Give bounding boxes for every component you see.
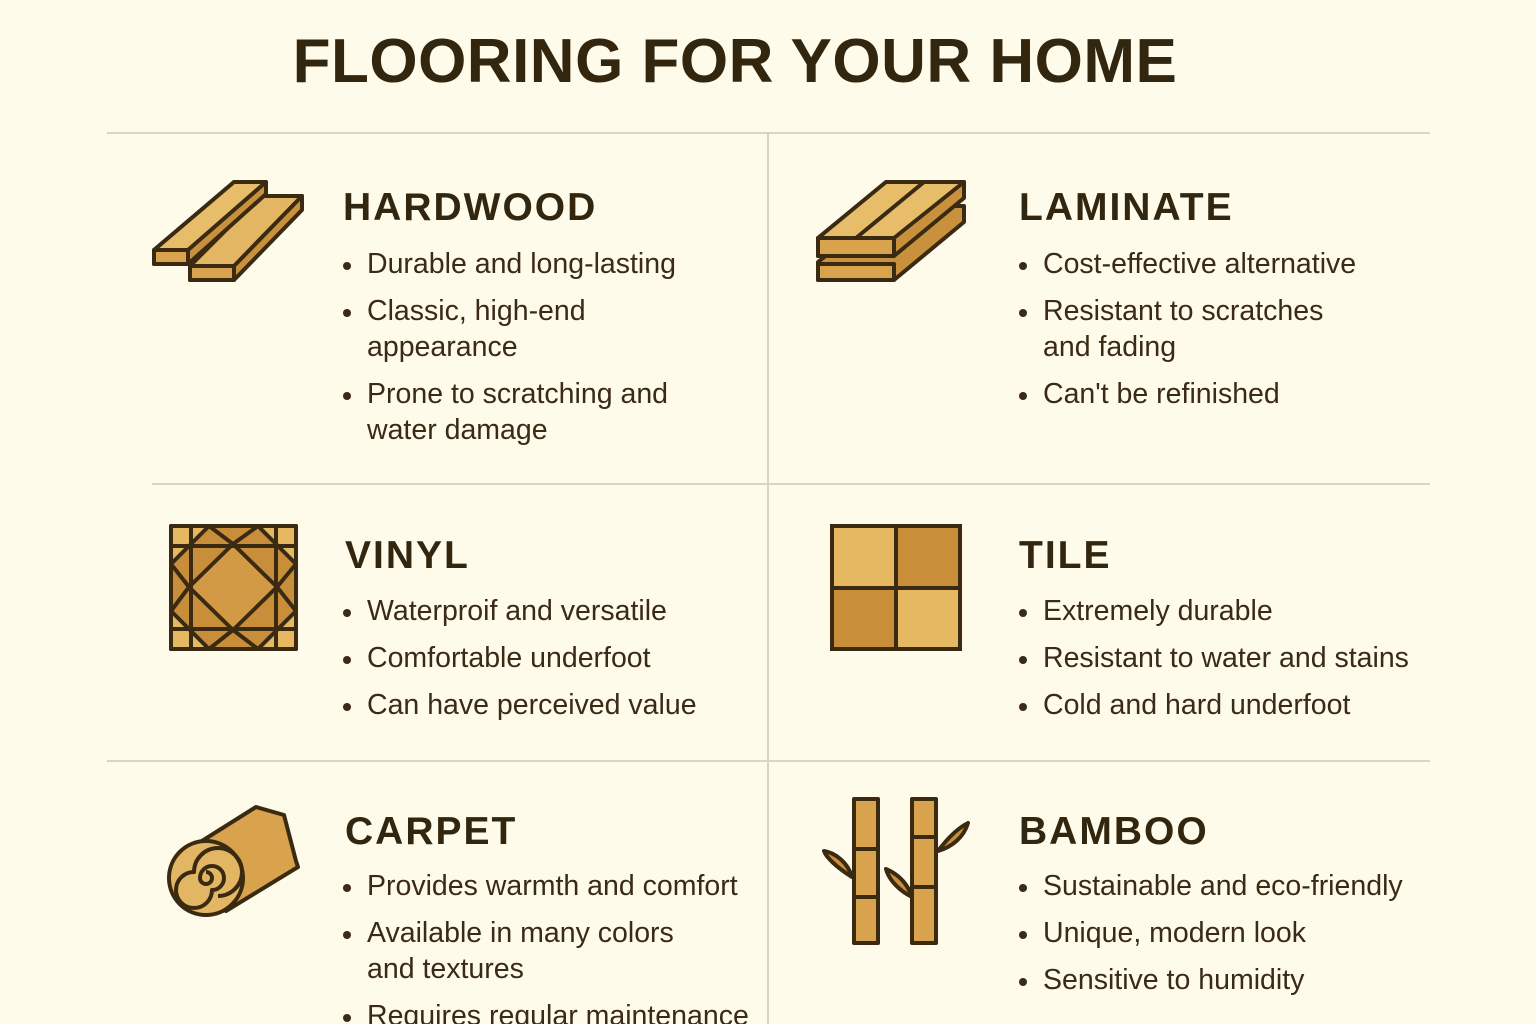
bullets: tile: Extremely durable <box>1043 595 1273 627</box>
bullets: laminate <box>1019 248 1356 410</box>
bullets: hardwood: Prone to scratching and <box>367 378 668 410</box>
icon: bamboo stalks <box>822 797 970 945</box>
icon: tile squares <box>830 524 962 651</box>
icon: vinyl tile pattern <box>169 524 298 651</box>
icon: carpet roll <box>167 805 300 917</box>
bullets: carpet: and textures <box>367 953 524 985</box>
icon: hardwood planks <box>152 180 304 282</box>
bullets: bamboo: Sustainable and eco-friendly <box>1043 870 1403 902</box>
panel: laminate <box>816 180 1356 410</box>
bullets: hardwood <box>343 248 676 446</box>
heading: vinyl: VINYL <box>345 534 470 577</box>
bullets: bamboo: Sensitive to humidity <box>1043 964 1304 996</box>
bullets: laminate: Cost-effective alternative <box>1043 248 1356 280</box>
heading: hardwood: HARDWOOD <box>343 186 597 229</box>
bullets: laminate: and fading <box>1043 331 1176 363</box>
heading: laminate: LAMINATE <box>1019 186 1234 229</box>
heading: bamboo: BAMBOO <box>1019 810 1209 853</box>
bullets: vinyl: Comfortable underfoot <box>367 642 651 674</box>
bullets: carpet: Available in many colors <box>367 917 674 949</box>
bullets: hardwood: water damage <box>367 414 548 446</box>
icon: laminate planks <box>816 180 966 282</box>
bullets: vinyl <box>343 595 697 721</box>
bullets: carpet <box>343 870 749 1024</box>
bullets: tile: Cold and hard underfoot <box>1043 689 1350 721</box>
bullets: hardwood: appearance <box>367 331 518 363</box>
panel: carpet <box>167 805 749 1024</box>
bullets: bamboo <box>1019 870 1403 996</box>
bullets: vinyl: Can have perceived value <box>367 689 697 721</box>
bullets: vinyl: Waterproif and versatile <box>367 595 667 627</box>
panel: hardwood <box>152 180 676 446</box>
title: FLOORING FOR YOUR HOME <box>293 27 1177 96</box>
panel: bamboo <box>822 797 1403 996</box>
heading: carpet: CARPET <box>345 810 517 853</box>
heading: tile: TILE <box>1019 534 1112 577</box>
bullets: laminate: Can't be refinished <box>1043 378 1280 410</box>
bullets: laminate: Resistant to scratches <box>1043 295 1323 327</box>
bullets: bamboo: Unique, modern look <box>1043 917 1306 949</box>
bullets: tile: Resistant to water and stains <box>1043 642 1409 674</box>
bullets: tile <box>1019 595 1409 721</box>
bullets: carpet: Provides warmth and comfort <box>367 870 738 902</box>
bullets: hardwood: Classic, high-end <box>367 295 586 327</box>
panel: vinyl <box>169 524 697 721</box>
panel: tile <box>830 524 1409 721</box>
bullets: hardwood: Durable and long-lasting <box>367 248 676 280</box>
